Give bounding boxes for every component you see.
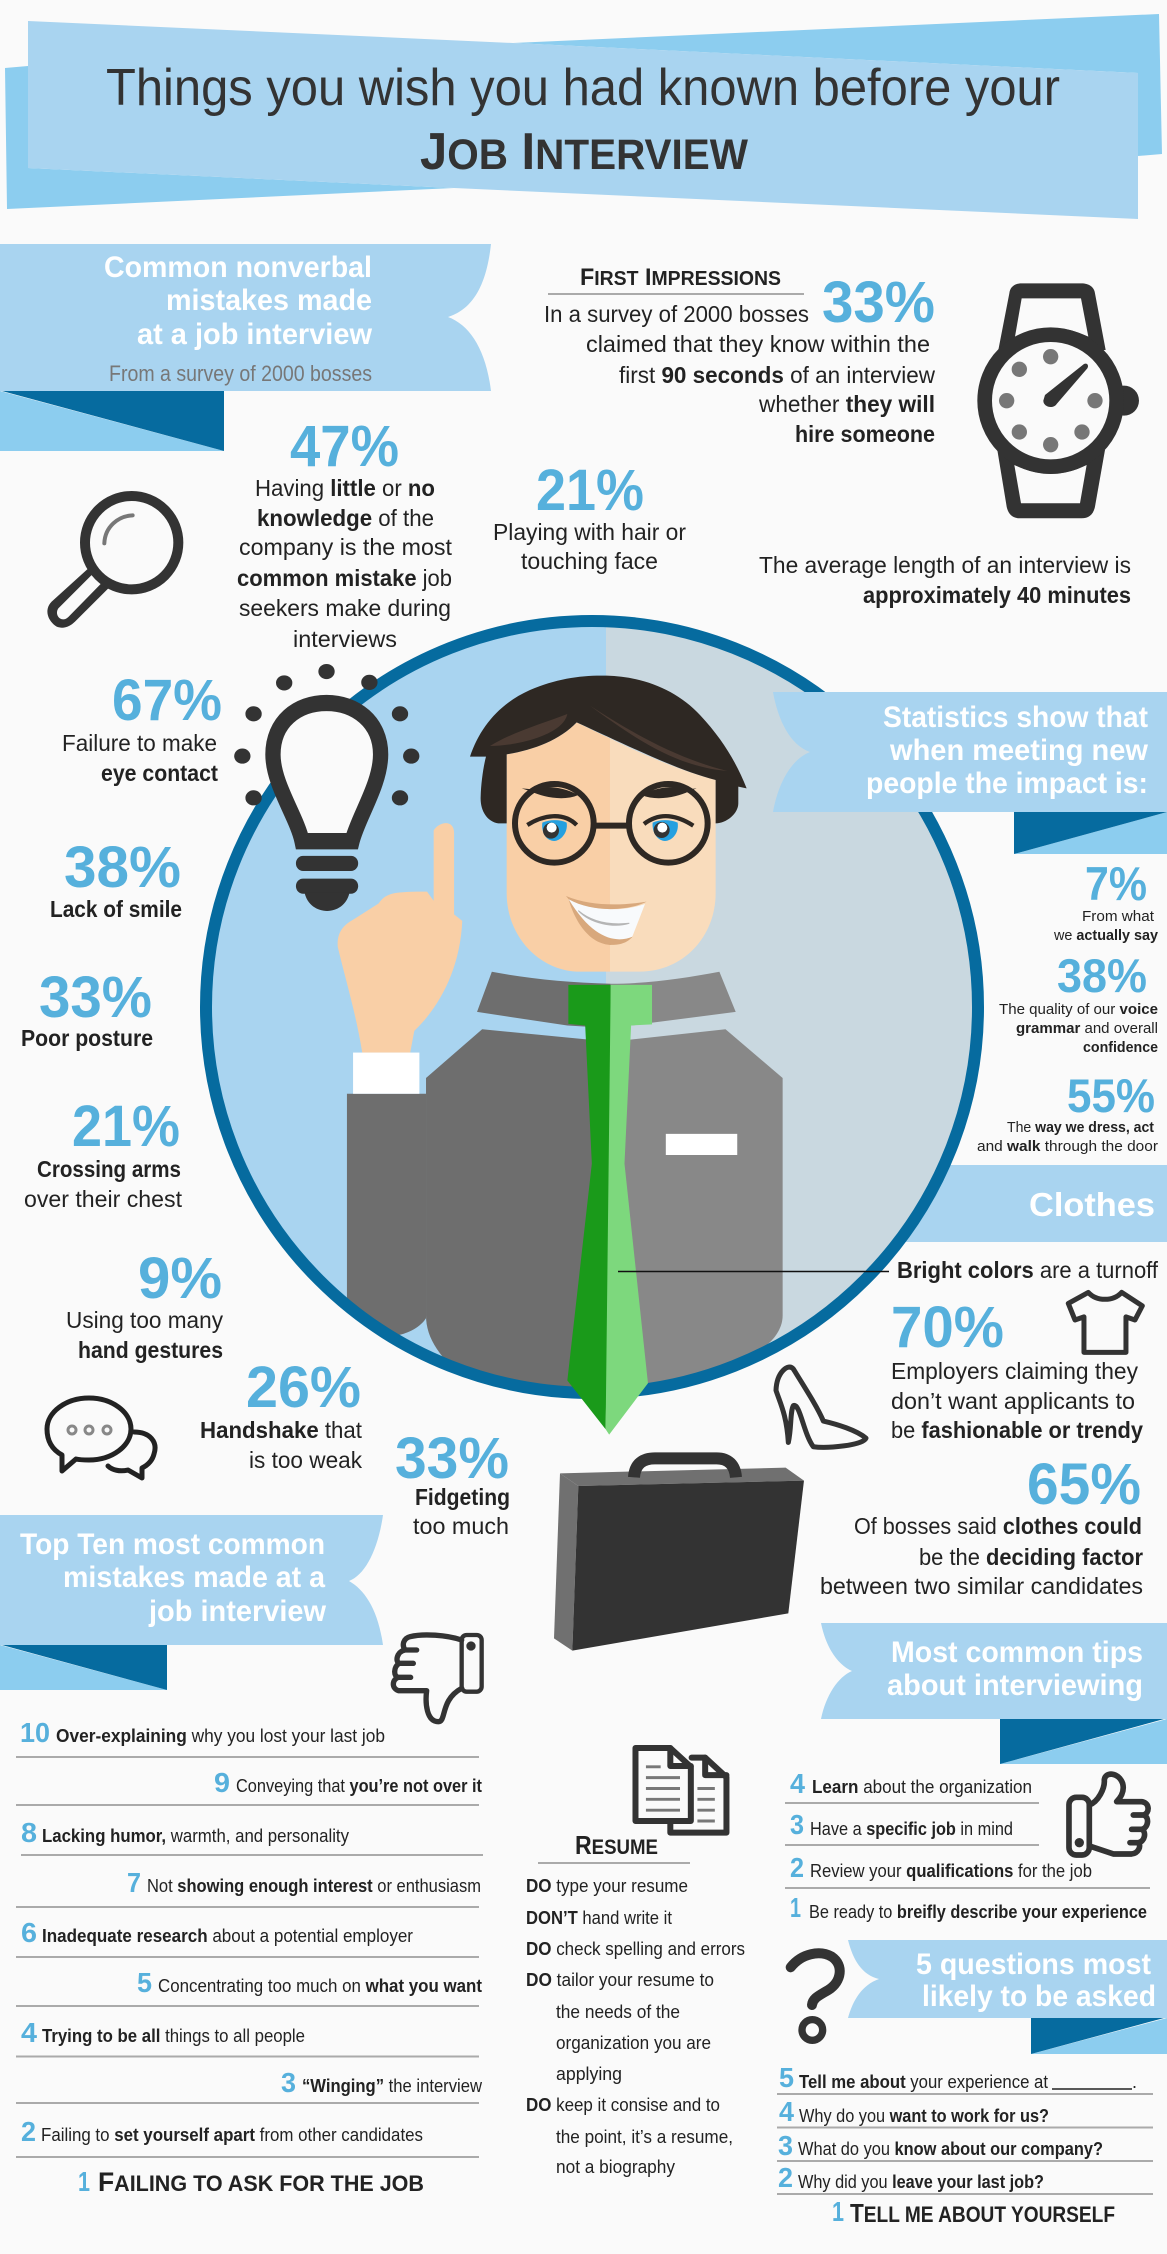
item 9: Conveying that you’re not over it (236, 1776, 482, 1796)
stat: 47 percent: Having little or no (255, 475, 435, 501)
panel: top ten banner: Top Ten most common (20, 1528, 325, 1561)
icon: t-shirt (1068, 1292, 1142, 1352)
panel: first impressions: 33% (822, 270, 935, 335)
question 2: Why did you leave your last job? (798, 2172, 1044, 2192)
panel: questions banner (848, 1940, 1167, 2054)
stat: 38 percent smile: 38% (64, 835, 181, 900)
item 4: Trying to be all things to all people (42, 2026, 305, 2046)
panel: tips banner: Most common tips (891, 1636, 1143, 1669)
question 5: Tell me about your experience at (799, 2072, 1048, 2092)
tip 1: Be ready to breifly describe your experience (809, 1902, 1147, 1922)
item 1: FAILING TO ASK FOR THE JOB (98, 2167, 424, 2197)
stat: 67 percent (62, 668, 222, 786)
stat: 33 percent posture (21, 965, 153, 1051)
panel: resume: DO keep it consise and to (526, 2095, 720, 2115)
stat: 38 percent voice: The quality of our voice (999, 1001, 1158, 1018)
panel: first impressions (544, 264, 935, 447)
question 1: TELL ME ABOUT YOURSELF (850, 2198, 1115, 2228)
stat: 33 percent fidgeting: Fidgeting (415, 1484, 510, 1510)
item 1: 1 (78, 2166, 90, 2197)
question 4: 4 (779, 2096, 794, 2127)
stat: 70 percent: don’t want applicants to (891, 1388, 1135, 1414)
stat: 65 percent: between two similar candidates (820, 1573, 1143, 1599)
item 5: 5 (137, 1967, 152, 1998)
stat: 65 percent: 65% (1027, 1452, 1141, 1517)
item 6 (21, 1917, 413, 1948)
stat: 38 percent voice: grammar and overall (1016, 1020, 1158, 1037)
panel: tips banner (821, 1623, 1167, 1764)
item 7: Not showing enough interest or enthusiasm (147, 1876, 481, 1896)
question 5: . (1132, 2072, 1137, 2092)
stat: 9 percent: hand gestures (78, 1337, 223, 1363)
icon: magnifying glass (47, 496, 178, 628)
item 4 (21, 2017, 305, 2048)
stat: 55 percent: The way we dress, act (1007, 1119, 1154, 1136)
stat: 47 percent: interviews (293, 626, 397, 652)
panel: resume: DON’T hand write it (526, 1908, 672, 1928)
item 8: 8 (21, 1817, 37, 1848)
panel: resume: the needs of the (556, 2002, 680, 2022)
stat: 7 percent: we actually say (1053, 927, 1159, 944)
icon: light bulb (234, 664, 419, 911)
list: top ten mistakes (16, 1717, 483, 2197)
icon: chat bubbles (47, 1398, 155, 1478)
stat: 70 percent: Employers claiming they (891, 1358, 1138, 1384)
illustration: man in circle (200, 610, 996, 1435)
panel: resume: DO check spelling and errors (526, 1939, 745, 1959)
panel: resume: DO type your resume (526, 1876, 688, 1896)
collar (477, 972, 736, 1028)
stat: 65 percent: Of bosses said clothes could (854, 1513, 1142, 1539)
tip 1 (790, 1892, 1147, 1923)
item 8 (21, 1817, 349, 1848)
stat: 33 percent fidgeting: too much (413, 1513, 509, 1539)
panel: first impressions: In a survey of 2000 bosses (544, 301, 809, 327)
tip 1: 1 (790, 1892, 801, 1923)
panel: statistics banner: people the impact is: (866, 767, 1148, 800)
question 1: 1 (832, 2196, 844, 2227)
stat: 47 percent: knowledge of the (257, 505, 434, 531)
tip 4: Learn about the organization (812, 1777, 1032, 1797)
item 9: 9 (214, 1767, 230, 1798)
panel: top ten banner: job interview (148, 1595, 327, 1628)
stat: 26 percent (200, 1355, 363, 1473)
stat: 26 percent: Handshake that (200, 1417, 363, 1443)
stat: 9 percent (66, 1246, 223, 1363)
stat: 33 percent posture: Poor posture (21, 1025, 153, 1051)
stat: 70 percent: 70% (891, 1295, 1004, 1360)
green tie (567, 985, 652, 1435)
stat: 21 percent hair: Playing with hair or (493, 519, 686, 545)
panel: resume: applying (556, 2064, 622, 2084)
panel: resume: not a biography (556, 2157, 675, 2177)
stat: 21 percent arms: over their chest (24, 1186, 183, 1212)
item 10: 10 (20, 1717, 50, 1748)
stat: 21 percent arms: 21% (72, 1094, 180, 1159)
item 4: 4 (21, 2017, 37, 2048)
question 3 (778, 2130, 1103, 2161)
stat: 33 percent fidgeting (395, 1426, 510, 1539)
stat: 47 percent: 47% (290, 414, 399, 479)
icon: thumbs down (393, 1635, 482, 1722)
list: five questions (777, 2062, 1153, 2228)
raised hand (338, 823, 462, 1094)
stat: 70 percent: be fashionable or trendy (891, 1417, 1143, 1443)
item 8: Lacking humor, warmth, and personality (42, 1826, 349, 1846)
stat: 21 percent arms: Crossing arms (37, 1156, 181, 1182)
question 3: 3 (778, 2130, 793, 2161)
panel: resume: the point, it’s a resume, (556, 2127, 733, 2147)
stat: 55 percent: and walk through the door (977, 1138, 1158, 1155)
title banner (5, 14, 1162, 219)
stat: 47 percent (237, 414, 453, 652)
stat: 33 percent posture: 33% (39, 965, 152, 1030)
item 10: Over-explaining why you lost your last job (56, 1726, 385, 1746)
stat: 38 percent voice: confidence (1083, 1039, 1158, 1056)
panel: nonverbal mistakes banner: Common nonverbal (104, 251, 372, 284)
stat: 26 percent: is too weak (249, 1447, 362, 1473)
stat: 21 percent arms (24, 1094, 183, 1212)
stat: 55 percent (977, 1069, 1158, 1155)
panel: questions banner: likely to be asked (922, 1980, 1156, 2013)
panel: first impressions: whether they will (758, 391, 935, 417)
stat: 47 percent: common mistake job (237, 565, 452, 591)
stat: 7 percent: From what (1082, 908, 1155, 925)
stat: 65 percent: be the deciding factor (919, 1544, 1143, 1570)
title banner: JOB INTERVIEW (420, 123, 748, 181)
stat: 70 percent (891, 1295, 1143, 1443)
item 5: Concentrating too much on what you want (158, 1976, 482, 1996)
question 3: What do you know about our company? (798, 2139, 1103, 2159)
item 10 (20, 1717, 385, 1748)
question 4: Why do you want to work for us? (799, 2106, 1049, 2126)
panel: first impressions: hire someone (795, 421, 935, 447)
tip 4 (790, 1768, 1032, 1799)
item 6: 6 (21, 1917, 37, 1948)
stat: 47 percent: company is the most (239, 534, 453, 560)
stat: 55 percent: 55% (1067, 1069, 1155, 1122)
stat: 38 percent voice: 38% (1057, 949, 1147, 1002)
item 3 (281, 2067, 483, 2098)
stat: 21 percent hair: touching face (521, 548, 658, 574)
tip 3: 3 (790, 1809, 804, 1840)
panel: statistics banner (773, 692, 1167, 854)
stat: 67 percent: 67% (112, 668, 222, 733)
list: interview tips (785, 1768, 1150, 1923)
panel: resume: RESUME (575, 1830, 658, 1860)
item 9 (214, 1767, 482, 1798)
panel: statistics banner: Statistics show that (883, 701, 1148, 734)
panel: resume: DO tailor your resume to (526, 1970, 714, 1990)
tip 4: 4 (790, 1768, 805, 1799)
stat: 26 percent: 26% (246, 1355, 361, 1420)
text: bright colors: Bright colors are a turnoff (897, 1257, 1159, 1283)
clothes banner (800, 1165, 1167, 1242)
panel: tips banner: about interviewing (887, 1669, 1143, 1702)
item 6: Inadequate research about a potential employer (42, 1926, 413, 1946)
panel: nonverbal mistakes banner: at a job interview (137, 318, 373, 351)
icon: thumbs up (1069, 1774, 1148, 1855)
panel: top ten banner (0, 1515, 383, 1690)
stat: 33 percent fidgeting: 33% (395, 1426, 509, 1491)
jacket (347, 1029, 783, 1397)
question 2 (778, 2162, 1044, 2193)
item 7: 7 (127, 1867, 141, 1898)
item 3: “Winging” the interview (302, 2076, 483, 2096)
title banner: Things you wish you had known before your (106, 59, 1060, 117)
panel: nonverbal mistakes banner (0, 244, 491, 451)
panel: questions banner: 5 questions most (916, 1948, 1151, 1981)
icon: question mark (791, 1953, 840, 2040)
stat: 38 percent smile (50, 835, 182, 922)
stat: 65 percent (820, 1452, 1143, 1599)
question 2: 2 (778, 2162, 793, 2193)
text: average interview length (759, 552, 1131, 608)
item 2: Failing to set yourself apart from other candidates (41, 2125, 423, 2145)
stat: 9 percent: 9% (138, 1246, 222, 1311)
stat: 38 percent voice (999, 949, 1158, 1056)
item 3: 3 (281, 2067, 296, 2098)
tip 2 (790, 1852, 1092, 1883)
icon: high heel (776, 1367, 866, 1447)
stat: 21 percent hair: 21% (536, 458, 644, 523)
panel: nonverbal mistakes banner: mistakes made (166, 284, 372, 317)
panel: first impressions: claimed that they know within the (586, 331, 930, 357)
panel: first impressions: first 90 seconds of an interview (619, 362, 935, 388)
tip 3 (790, 1809, 1013, 1840)
stat: 9 percent: Using too many (66, 1307, 223, 1333)
tip 3: Have a specific job in mind (810, 1819, 1013, 1839)
head (470, 676, 747, 972)
stat: 7 percent: 7% (1085, 857, 1147, 910)
text: average interview length: The average length of an interview is (759, 552, 1131, 578)
tip 2: 2 (790, 1852, 804, 1883)
panel: statistics banner: when meeting new (889, 734, 1149, 767)
heading: clothes: Clothes (1029, 1186, 1155, 1223)
stat: 38 percent smile: Lack of smile (50, 896, 182, 922)
stat: 7 percent (1053, 857, 1159, 944)
icon: resume documents (635, 1748, 726, 1833)
question 5 (779, 2062, 1137, 2093)
item 2 (21, 2116, 423, 2147)
stat: 47 percent: seekers make during (239, 595, 451, 621)
question 5: 5 (779, 2062, 794, 2093)
stat: 67 percent: Failure to make (62, 730, 217, 756)
panel: top ten banner: mistakes made at a (63, 1561, 325, 1594)
icon: briefcase (554, 1458, 804, 1651)
stat: 21 percent hair (493, 458, 686, 574)
panel: resume: organization you are (556, 2033, 711, 2053)
item 2: 2 (21, 2116, 36, 2147)
panel: nonverbal mistakes banner: From a survey of 2000 bosses (109, 361, 372, 386)
item 7 (127, 1867, 481, 1898)
tip 2: Review your qualifications for the job (810, 1861, 1092, 1881)
stat: 67 percent: eye contact (101, 760, 218, 786)
text: average interview length: approximately 40 minutes (863, 582, 1131, 608)
panel: first impressions: FIRST IMPRESSIONS (580, 264, 781, 291)
icon: wristwatch (985, 283, 1139, 518)
item 5 (137, 1967, 482, 1998)
panel: resume (526, 1830, 745, 2177)
question 4 (779, 2096, 1049, 2127)
